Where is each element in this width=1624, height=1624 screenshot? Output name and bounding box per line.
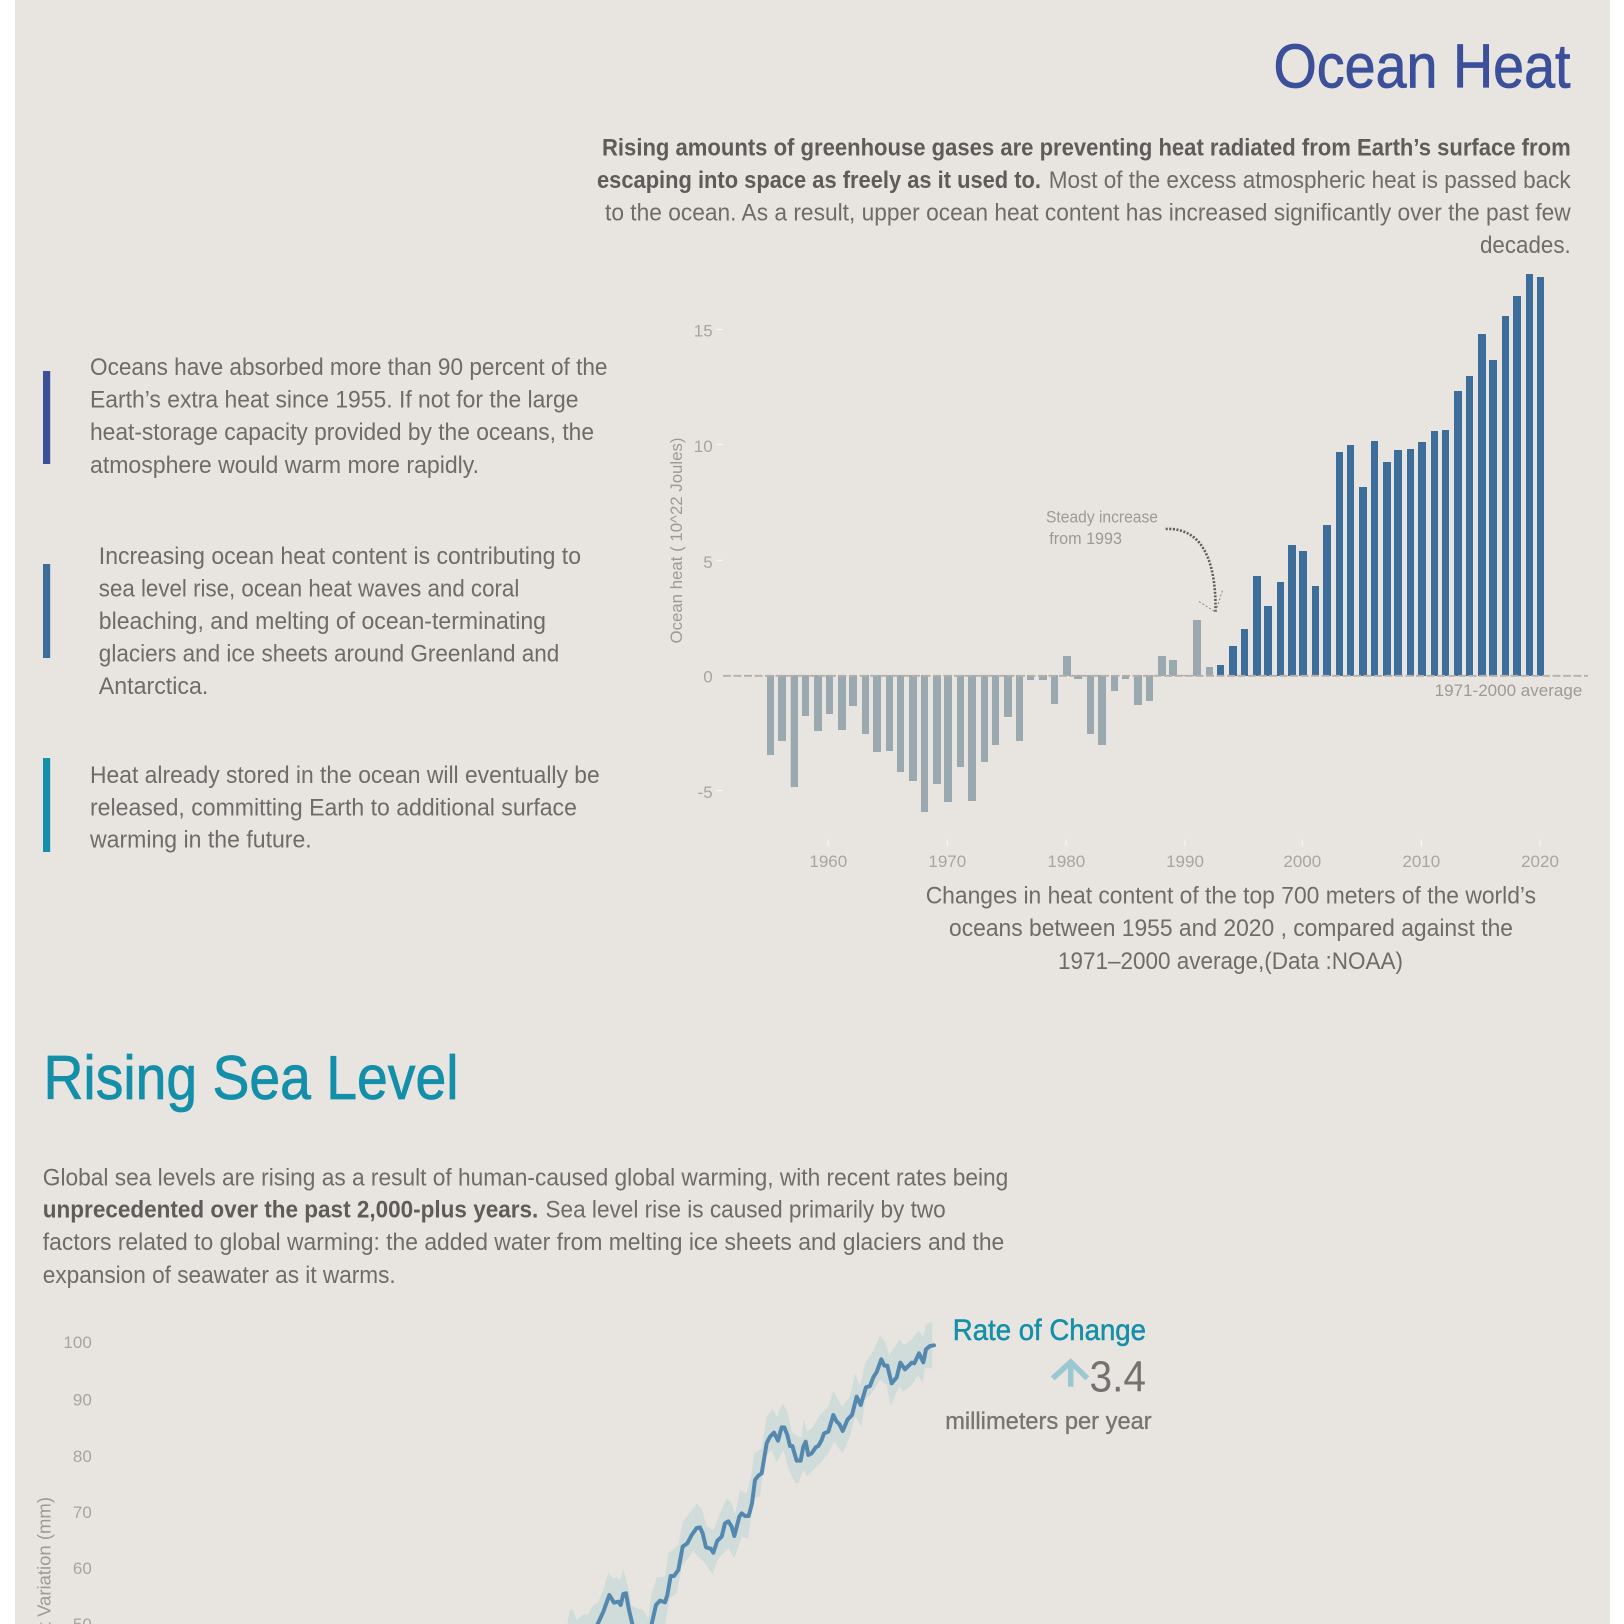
text: oceans absorbed heat: Earth’s extra heat since 1955. If not for the large [90,387,578,414]
x axis labels: 1990 [1166,852,1204,871]
text block: sea level intro: expansion of seawater as it warms. [43,1262,396,1289]
text block: ocean heat intro: Most of the excess atmospheric heat is passed back [1049,167,1572,194]
y axis labels: 10 [694,437,713,456]
annotation: steady increase [1046,508,1158,548]
annotation: steady increase: Steady increase [1046,508,1158,526]
panel: key point on heat absorption [43,354,608,479]
text block: sea level intro: Global sea levels are rising as a result of human-caused global warming, with recent rates being [43,1164,1008,1191]
text: impacts of ocean heat: bleaching, and melting of ocean-terminating [99,608,546,635]
chart caption [926,883,1536,975]
panel: key point on stored heat [43,758,600,854]
y axis labels: 90 [73,1390,92,1410]
y axis labels: 60 [73,1559,92,1578]
text block: ocean heat intro [597,134,1572,259]
icon: up arrow [1053,1362,1087,1387]
text block: sea level intro: Sea level rise is caused primarily by two [546,1197,946,1224]
title: Ocean Heat: Ocean Heat [1274,32,1570,102]
uncertainty band and trend line [567,1322,934,1624]
text: impacts of ocean heat: Antarctica. [99,673,208,700]
y axis labels: 80 [73,1447,92,1466]
x axis labels: 1980 [1047,852,1085,871]
text block: sea level intro: unprecedented over the past 2,000-plus years. [43,1197,538,1224]
chart caption: oceans between 1955 and 2020 , compared against the [949,915,1513,942]
chart caption: Changes in heat content of the top 700 meters of the world’s [926,883,1536,910]
y axis labels [63,1333,92,1624]
arrow: annotation pointer [1166,529,1223,612]
line chart: sea level variation [34,1322,934,1624]
text: oceans absorbed heat [90,354,608,479]
text: impacts of ocean heat: sea level rise, ocean heat waves and coral [99,576,519,603]
text: impacts of ocean heat [99,543,581,700]
panel: key point on ocean heat impacts [43,543,581,700]
text block: ocean heat intro: to the ocean. As a result, upper ocean heat content has increased significantly over the past few [605,200,1571,226]
y axis labels [694,322,713,802]
accent bar: steel blue [43,564,50,658]
y axis labels: 100 [63,1333,92,1352]
value: 3.4 [1090,1352,1146,1402]
text: stored heat release: released, committing Earth to additional surface [90,794,577,821]
y axis title: Ocean heat ( 10^22 Joules) [668,438,686,644]
text block: sea level intro [43,1164,1008,1289]
y axis labels: 70 [73,1503,92,1522]
y axis labels: 0 [703,668,713,687]
chart caption: 1971–2000 average,(Data :NOAA) [1058,948,1403,975]
bars: below-average years [767,620,1213,812]
text block: ocean heat intro: escaping into space as freely as it used to. [597,167,1041,194]
text block: ocean heat intro: decades. [1480,232,1571,259]
x axis labels: 2010 [1402,852,1440,871]
y axis labels: 5 [703,553,713,572]
heading: Rate of Change [953,1314,1146,1347]
y axis labels: -5 [698,783,713,802]
title: Rising Sea Level: Rising Sea Level [44,1044,458,1113]
text: stored heat release [89,762,600,854]
text: oceans absorbed heat: Oceans have absorbed more than 90 percent of the [90,354,608,381]
text: impacts of ocean heat: Increasing ocean heat content is contributing to [99,543,581,570]
baseline label: 1971-2000 average [1435,682,1582,700]
annotation: steady increase: from 1993 [1049,530,1122,548]
average baseline [723,675,1588,677]
bars: steady increase years [1217,274,1544,676]
accent bar: indigo [43,371,50,464]
bar chart: ocean heat content 1955-2020 [668,274,1588,871]
accent bar: teal [43,758,50,852]
x axis labels: 1970 [928,852,966,871]
unit: millimeters per year [945,1408,1152,1435]
x axis labels: 2020 [1521,852,1559,871]
text: oceans absorbed heat: atmosphere would warm more rapidly. [90,452,479,479]
text: stored heat release: Heat already stored in the ocean will eventually be [90,762,600,789]
x axis labels: 1960 [809,852,847,871]
x axis labels: 2000 [1283,852,1321,871]
text: impacts of ocean heat: glaciers and ice sheets around Greenland and [99,641,559,668]
callout: rate of change [945,1314,1152,1435]
text: stored heat release: warming in the future. [89,827,312,854]
y axis labels: 15 [694,322,713,341]
x axis labels [809,852,1559,871]
text block: sea level intro: factors related to global warming: the added water from melting ice sheets and glaciers and the [43,1229,1004,1256]
text: oceans absorbed heat: heat-storage capacity provided by the oceans, the [90,419,594,446]
